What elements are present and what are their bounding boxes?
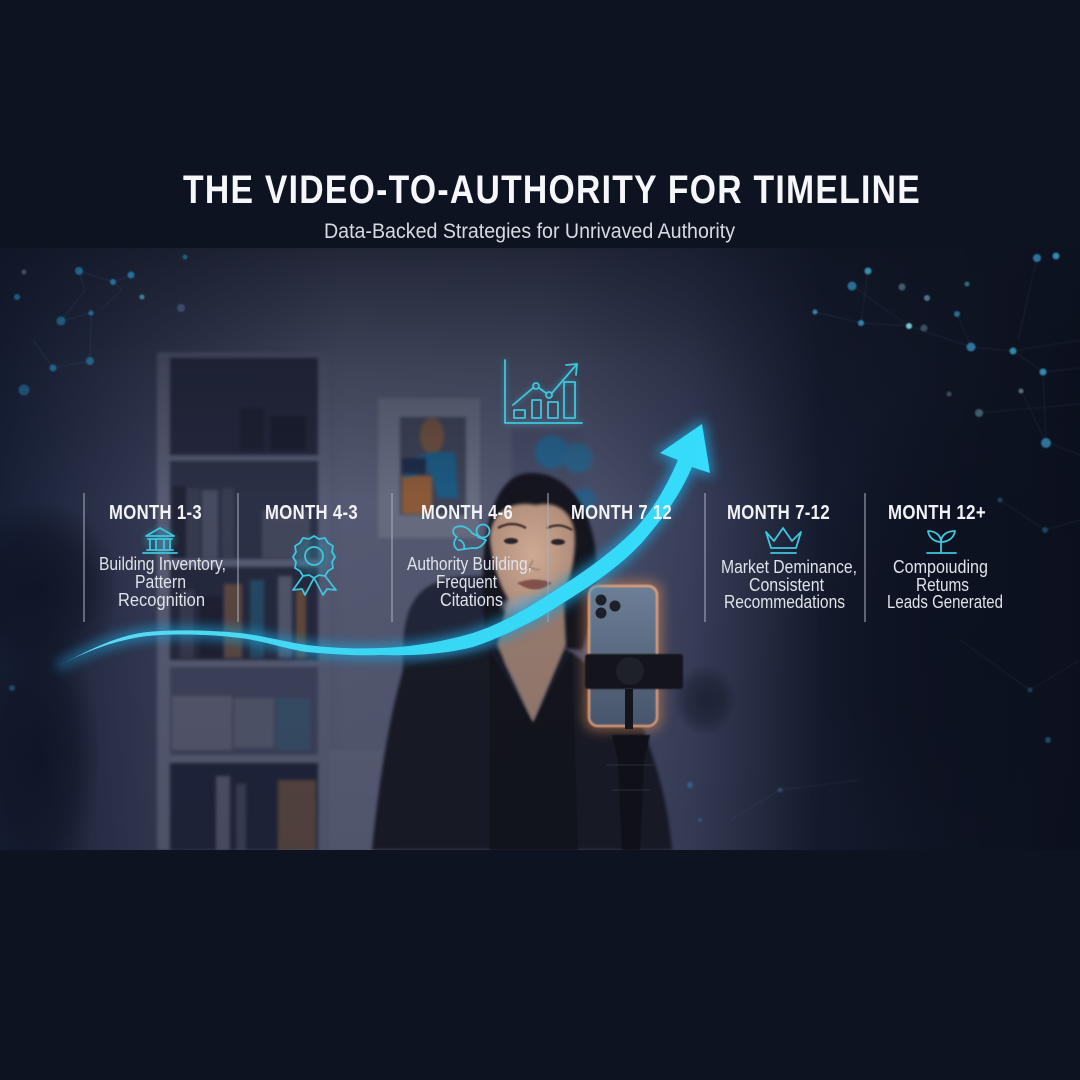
- face: [490, 504, 575, 620]
- description: month 12+: [887, 557, 1003, 612]
- column: month 4-3: [265, 502, 358, 595]
- right dark furniture: [678, 670, 730, 729]
- description: month 7-12: Consistent: [749, 575, 824, 595]
- description: month 7-12: Market Deminance,: [721, 557, 857, 577]
- facial features: [498, 524, 572, 616]
- column: month 12+: [887, 502, 1003, 612]
- subtitle: Data-Backed Strategies for Unrivaved Authority: [324, 220, 735, 243]
- icon: rising bar chart: [505, 360, 582, 423]
- phone on tripod: [584, 581, 683, 850]
- bookshelf: [156, 352, 319, 850]
- description: month 1-3: [99, 554, 226, 610]
- column: month 7-12: [721, 502, 857, 612]
- timeline dividers: [84, 493, 865, 622]
- chair: [403, 575, 505, 670]
- heading: month 4-6: MONTH 4-6: [421, 502, 513, 524]
- heading: month 12+: MONTH 12+: [888, 502, 986, 524]
- hair: [483, 473, 597, 650]
- right wall art: [513, 432, 598, 512]
- description: month 4-6: Authority Building,: [407, 554, 532, 574]
- icon: linked hands: [453, 524, 490, 550]
- description: month 12+: Compoιuding: [893, 557, 988, 577]
- blouse: [490, 652, 578, 850]
- dark jacket: [372, 647, 672, 850]
- description: month 1-3: Recognition: [118, 590, 205, 610]
- description: month 4-6: Frequent: [436, 572, 497, 592]
- column: month 4-6: [407, 502, 532, 610]
- description: month 7-12: [721, 557, 857, 612]
- panel: office photo scene: [0, 248, 1060, 850]
- wall picture: [378, 398, 480, 538]
- icon: sprout: [927, 531, 956, 553]
- photo top and edge shading: [0, 248, 828, 850]
- network: left nodes: [9, 254, 188, 691]
- description: month 4-6: [407, 554, 532, 610]
- network: right nodes: [687, 252, 1080, 822]
- neck and chest: [497, 600, 566, 722]
- heading: month 7-12: MONTH 7-12: [727, 502, 830, 524]
- column: month 7 12: MONTH 7 12: [571, 502, 672, 524]
- heading: month 4-3: MONTH 4-3: [265, 502, 358, 524]
- heading: month 1-3: MONTH 1-3: [109, 502, 202, 524]
- description: month 7-12: Recommedations: [724, 592, 845, 612]
- description: month 12+: Leads Generated: [887, 592, 1003, 612]
- growth arrow: [58, 424, 710, 666]
- title: THE VIDEO-TO-AUTHORITY FOR TIMELINE: [183, 168, 921, 212]
- icon: crown: [766, 528, 801, 553]
- description: month 1-3: Building Inventory,: [99, 554, 226, 574]
- icon: award rosette: [293, 536, 336, 595]
- icon: institution building: [143, 528, 177, 553]
- description: month 12+: Retums: [916, 575, 969, 595]
- description: month 4-6: Citations: [440, 590, 503, 610]
- left plant silhouette: [0, 518, 108, 850]
- description: month 1-3: Pattern: [135, 572, 186, 592]
- column: month 1-3: [99, 502, 226, 610]
